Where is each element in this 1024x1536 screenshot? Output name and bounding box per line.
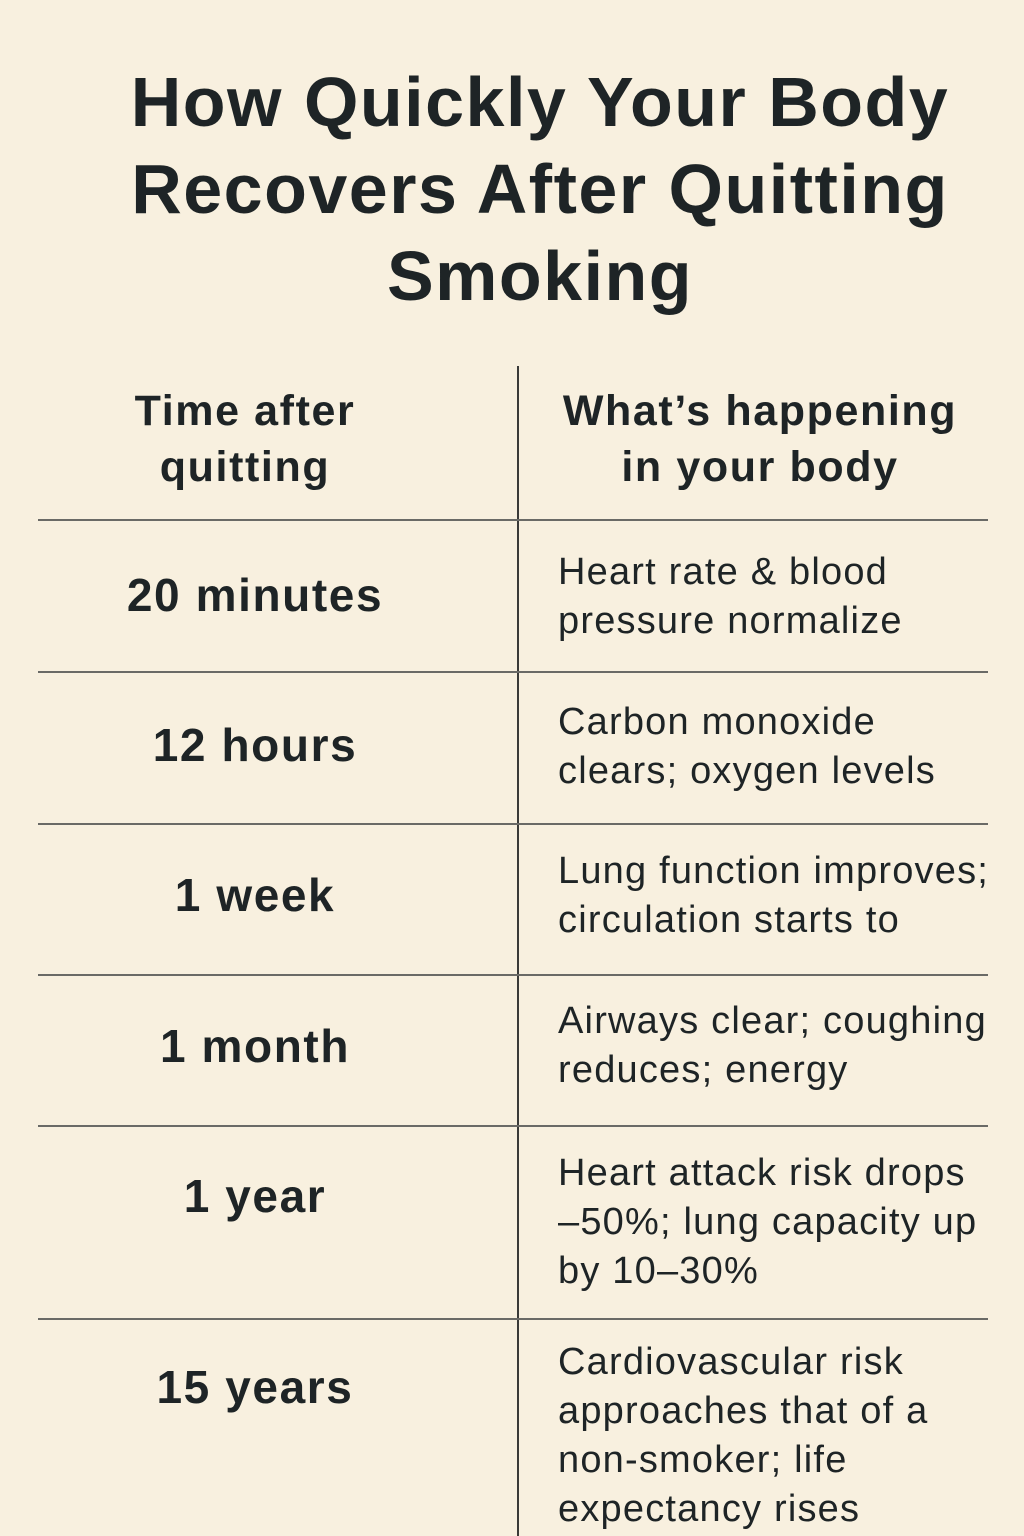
vertical divider <box>517 366 519 1536</box>
desc 15 years <box>558 1341 928 1530</box>
desc 12 hours <box>558 701 936 792</box>
desc 1 week <box>558 850 989 941</box>
title: Smoking <box>387 237 693 315</box>
row 15 years: 15 years <box>156 1361 353 1413</box>
header: body: What’s happening <box>563 387 957 435</box>
header: time: Time after <box>135 387 355 435</box>
desc 1 week: Lung function improves; <box>558 850 989 892</box>
title: Recovers After Quitting <box>131 150 949 228</box>
desc 15 years: Cardiovascular risk <box>558 1341 904 1383</box>
desc 12 hours: Carbon monoxide <box>558 701 876 743</box>
desc 15 years: non-smoker; life <box>558 1439 848 1481</box>
row 20 minutes: 20 minutes <box>127 569 383 621</box>
desc 20 minutes <box>558 551 903 642</box>
row 1 week: 1 week <box>175 869 335 921</box>
row 1 year: 1 year <box>184 1170 326 1222</box>
header: time: quitting <box>160 443 330 491</box>
desc 1 month: Airways clear; coughing <box>558 1000 987 1042</box>
desc 15 years: expectancy rises <box>558 1488 860 1530</box>
table <box>38 366 988 1536</box>
row 1 month: 1 month <box>160 1020 350 1072</box>
desc 20 minutes: pressure normalize <box>558 600 903 642</box>
desc 1 year: Heart attack risk drops <box>558 1152 966 1194</box>
desc 20 minutes: Heart rate & blood <box>558 551 888 593</box>
header: body <box>562 387 957 491</box>
desc 1 week: circulation starts to <box>558 899 900 941</box>
desc 1 month <box>558 1000 987 1091</box>
desc 1 month: reduces; energy <box>558 1049 848 1091</box>
desc 1 year: by 10–30% <box>558 1250 759 1292</box>
row 12 hours: 12 hours <box>153 719 357 771</box>
title <box>131 63 949 315</box>
desc 12 hours: clears; oxygen levels <box>558 750 936 792</box>
desc 1 year: –50%; lung capacity up <box>558 1201 977 1243</box>
desc 1 year <box>558 1152 977 1292</box>
header: time <box>135 387 355 491</box>
desc 15 years: approaches that of a <box>558 1390 928 1432</box>
header: body: in your body <box>621 443 899 491</box>
title: How Quickly Your Body <box>131 63 949 141</box>
